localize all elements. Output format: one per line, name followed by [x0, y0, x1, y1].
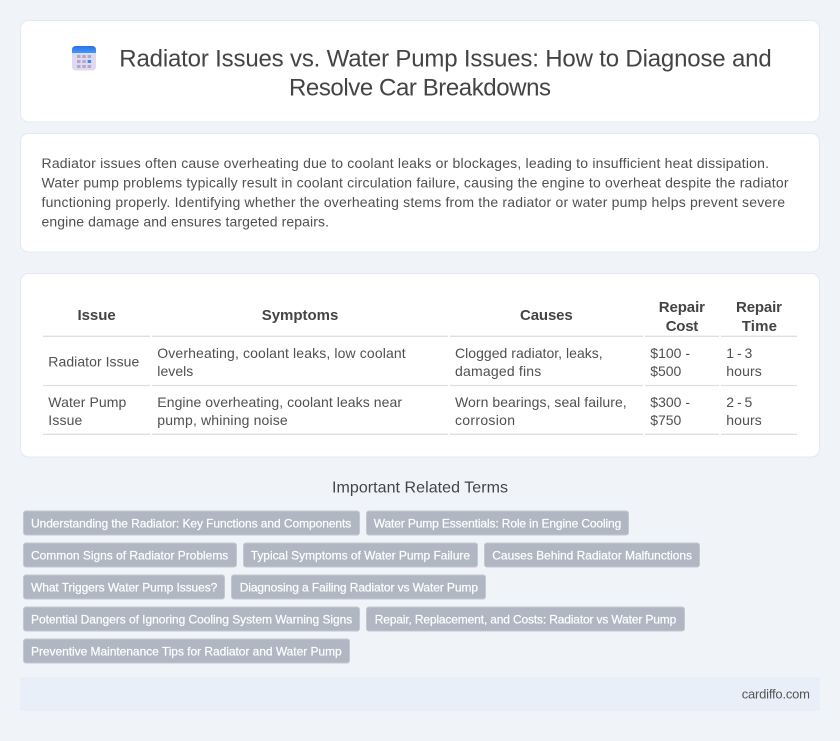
- table row: radiator issue: levels: [157, 363, 193, 379]
- table header row: [78, 299, 782, 335]
- tag row 1: Water Pump Essentials: Role in Engine Cooling: [374, 516, 621, 530]
- tag row 4: Potential Dangers of Ignoring Cooling System Warning Signs: [31, 612, 352, 626]
- table row: water pump issue: $750: [650, 412, 682, 428]
- tag row 2: Typical Symptoms of Water Pump Failure: [251, 548, 470, 562]
- icon: calendar: [72, 46, 96, 70]
- table header row: Cost: [666, 318, 698, 335]
- table row: radiator issue: Clogged radiator, leaks,: [455, 345, 603, 361]
- tag row 4: Repair, Replacement, and Costs: Radiator vs Water Pump: [375, 612, 677, 626]
- tag row 2: [24, 543, 700, 567]
- tag row 2: Common Signs of Radiator Problems: [31, 548, 228, 562]
- table header row: Symptoms: [262, 307, 338, 324]
- panel: header: [20, 20, 820, 122]
- panel: related term tags: [24, 511, 700, 663]
- table row: water pump issue: hours: [726, 412, 762, 428]
- table header row: Repair: [736, 299, 782, 316]
- intro text block: Water pump problems typically result in coolant circulation failure, causing the engine to overheat despite the radiator: [42, 174, 789, 190]
- table row: radiator issue: hours: [726, 363, 762, 379]
- tag row 1: [24, 511, 628, 535]
- tag row 3: Diagnosing a Failing Radiator vs Water Pump: [240, 580, 478, 594]
- table row: radiator issue: Overheating, coolant leaks, low coolant: [157, 345, 406, 361]
- tag row 4: [24, 607, 684, 631]
- table row: water pump issue: Water Pump: [48, 394, 127, 410]
- title: Radiator Issues vs. Water Pump Issues: How to Diagnose and: [119, 46, 772, 73]
- footer: cardiffo.com: [742, 686, 810, 701]
- tag row 5: Preventive Maintenance Tips for Radiator and Water Pump: [31, 644, 342, 658]
- tag row 1: Understanding the Radiator: Key Functions and Components: [31, 516, 351, 530]
- table row: radiator issue: Radiator Issue: [48, 354, 140, 370]
- table row: water pump issue: Engine overheating, coolant leaks near: [157, 394, 402, 410]
- intro text block: engine damage and ensures targeted repairs.: [42, 214, 329, 230]
- table header row: Issue: [78, 307, 116, 324]
- intro text block: functioning properly. Identifying whether the overheating stems from the radiator or water pump helps prevent severe: [42, 194, 785, 210]
- heading: important related terms: Important Related Terms: [332, 480, 508, 497]
- table row: radiator issue: 1 - 3: [726, 345, 753, 361]
- footer: [20, 677, 820, 711]
- tag row 5: [24, 639, 350, 663]
- table row: water pump issue: [48, 394, 762, 428]
- table header row: Time: [742, 318, 777, 335]
- table header row: Causes: [520, 307, 573, 324]
- table row: water pump issue: $300 -: [650, 394, 690, 410]
- tag row 2: Causes Behind Radiator Malfunctions: [492, 548, 692, 562]
- table row: radiator issue: $100 -: [650, 345, 690, 361]
- title: Resolve Car Breakdowns: [289, 75, 551, 102]
- table row: water pump issue: corrosion: [455, 412, 515, 428]
- table row: water pump issue: pump, whining noise: [157, 412, 288, 428]
- panel: comparison table: [20, 274, 820, 457]
- table row: radiator issue: $500: [650, 363, 682, 379]
- table row: water pump issue: Issue: [48, 412, 83, 428]
- table row: radiator issue: damaged fins: [455, 363, 541, 379]
- intro text block: [42, 155, 789, 230]
- table row: water pump issue: 2 - 5: [726, 394, 753, 410]
- title: [119, 46, 772, 102]
- intro text block: Radiator issues often cause overheating due to coolant leaks or blockages, leading to insufficient heat dissipation.: [42, 155, 769, 171]
- table header row: Repair: [659, 299, 705, 316]
- table row: water pump issue: Worn bearings, seal failure,: [455, 394, 627, 410]
- table row: radiator issue: [48, 345, 762, 379]
- tag row 3: What Triggers Water Pump Issues?: [31, 580, 218, 594]
- tag row 3: [24, 575, 486, 599]
- panel: introduction: [20, 134, 820, 252]
